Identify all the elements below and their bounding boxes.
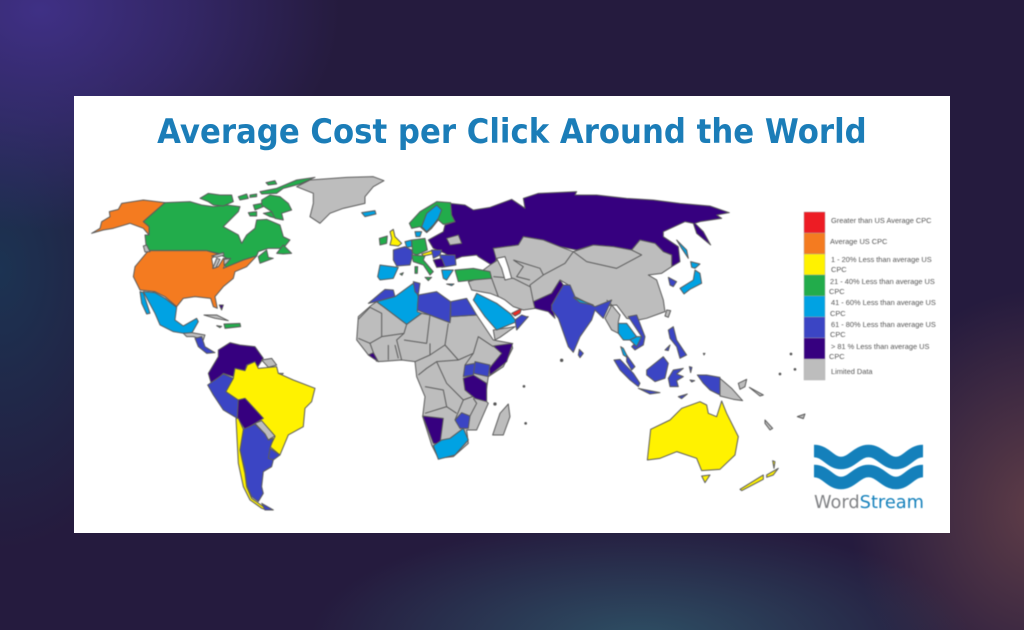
white map panel [74,96,950,533]
Italy [412,255,433,275]
Lesser Sunda Islands [678,394,687,399]
Nordics [409,202,455,233]
United Kingdom [390,229,402,246]
legend labels: 1 - 20% Less than average US [831,255,932,264]
Kenya [473,362,490,377]
Papua Indonesia [697,375,720,395]
legend labels: CPC [830,309,846,318]
Pakistan [533,280,568,318]
Madagascar [493,404,510,435]
Ireland [379,236,387,245]
Nepal [573,297,593,305]
Cyprus [447,284,454,286]
Borneo [647,357,668,382]
North America [92,177,384,340]
Somalia [489,343,513,375]
Egypt [451,298,477,317]
logo wordmark: WordStream [814,493,924,513]
Sri Lanka [578,349,583,358]
New Zealand [740,461,778,491]
Panama and Costa Rica [195,337,215,353]
South Korea [668,277,677,287]
South America [195,337,315,510]
Hungary [432,250,442,258]
Oceania [638,353,805,491]
Malaysia [627,355,635,370]
Africa limited data [357,302,513,458]
Asian borders [492,250,642,305]
legend labels: CPC [829,287,845,296]
Central America [183,333,205,340]
Turkey [455,268,492,282]
legend [804,212,936,380]
Baja California [140,292,150,314]
Serbia [433,258,445,267]
Colombia Venezuela Ecuador [208,343,263,385]
Sweden [422,205,442,232]
Namibia [423,416,443,444]
WordStream logo [814,451,924,513]
Uganda [463,363,475,377]
Russia and Eastern Europe [428,192,729,267]
Central Asia China Middle East [468,237,672,320]
logo waves [814,451,923,483]
legend labels: 61 - 80% Less than average US [831,320,936,329]
Belarus [447,235,462,245]
Paraguay [255,421,275,440]
Chile [236,418,267,510]
Thailand [618,323,637,340]
Romania [440,255,456,267]
Java [638,388,660,394]
Pacific island dots [779,353,796,375]
legend labels: CPC [830,330,846,339]
Mexico [143,292,198,333]
Uruguay [268,448,280,460]
Tierra del Fuego [262,503,273,510]
small island dots [493,359,563,425]
Philippines [668,327,687,358]
Papua New Guinea [720,378,743,401]
African borders [358,307,493,420]
Europe [378,202,492,286]
France [393,247,413,266]
Spain and Portugal [378,265,398,280]
legend labels: 41 - 60% Less than average US [831,298,936,307]
Australia [647,401,738,471]
Peru [208,374,238,418]
Libya [417,292,451,323]
legend labels: Greater than US Average CPC [831,216,932,225]
Argentina [240,424,273,502]
Morocco [368,289,395,303]
Iceland [362,211,376,217]
Hainan [665,310,671,317]
title: Average Cost per Click Around the World [157,112,867,151]
Germany [412,238,427,255]
Zimbabwe [455,413,470,428]
Malay Peninsula [621,347,628,358]
Tasmania [702,475,710,483]
Pacific islands [738,379,805,430]
United Arab Emirates [512,308,522,316]
legend labels: Average US CPC [830,237,888,246]
United States [133,251,257,308]
legend labels: CPC [831,265,847,274]
Czech Republic [422,251,433,256]
Saudi Arabia [473,293,517,330]
Japan [677,240,702,294]
Tanzania [463,375,487,402]
Africa and Arabia [357,282,563,459]
Benelux [405,240,412,247]
legend labels: Limited Data [831,367,873,376]
Bolivia [237,398,263,429]
legend labels: > 81 % Less than average US [831,342,929,351]
legend labels [829,216,936,376]
Denmark [415,232,422,237]
Liberia [368,353,378,362]
Asia [428,192,729,387]
Great Lakes [143,245,231,268]
Sulawesi [668,368,683,387]
Alaska [92,200,165,235]
Canada [143,177,315,268]
Greenland [297,177,384,223]
Brazil [226,362,315,455]
Caspian Sea [497,257,512,280]
Vietnam [628,315,645,350]
legend labels: CPC [829,352,845,361]
legend labels: 21 - 40% Less than average US [830,277,935,286]
Greece [442,270,453,280]
Algeria [377,283,422,324]
Tunisia [413,282,420,295]
India [552,285,612,352]
South Africa [433,428,468,459]
Cambodia [630,337,642,347]
Mediterranean islands [400,267,432,281]
Caribbean islands [204,305,241,328]
Guianas [262,358,283,377]
Yemen [493,327,515,340]
Myanmar [605,305,620,333]
legend swatches [804,212,825,380]
Oman [515,315,528,330]
small islands [665,345,705,382]
Sumatra [614,359,640,387]
